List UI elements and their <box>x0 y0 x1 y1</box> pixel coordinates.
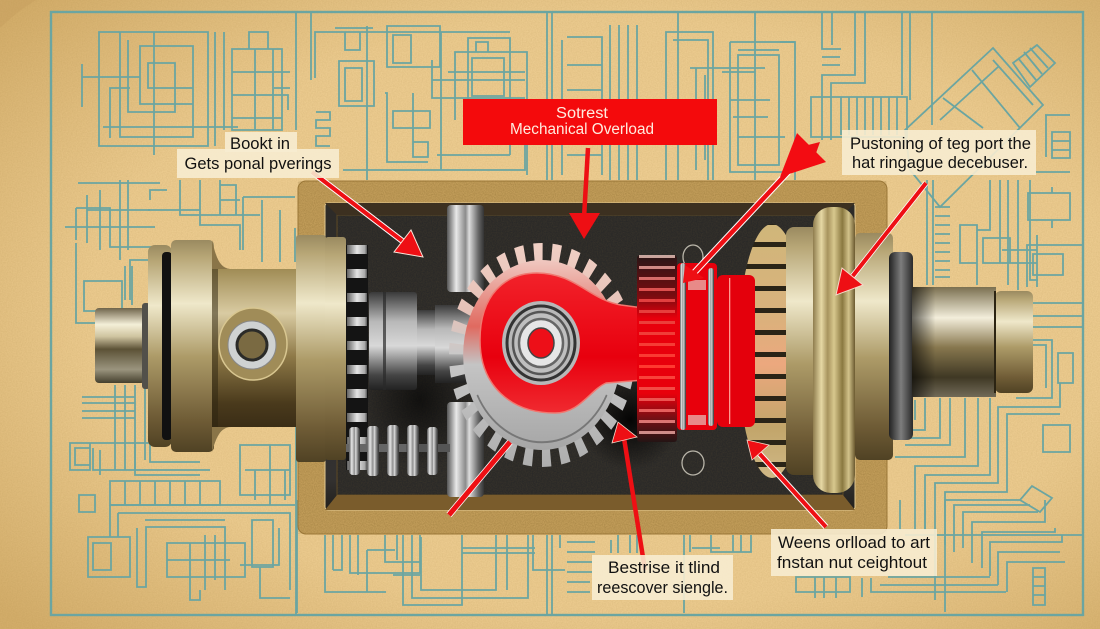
callout: top left: Bookt in <box>230 134 290 153</box>
flange three <box>296 235 326 462</box>
callout: bottom centre: Bestrise it tlind <box>608 558 720 577</box>
housing frame <box>298 181 887 534</box>
callout: bottom right: Weens orlload to art <box>778 533 930 552</box>
central overload gear <box>457 253 644 457</box>
title banner: Sotrest <box>556 105 609 122</box>
arrow: lower left line to gear <box>449 442 510 515</box>
callout: top right: Pustoning of teg port the <box>850 134 1031 153</box>
small pinion <box>435 305 470 383</box>
callout: top right: hat ringague decebuser. <box>852 153 1028 172</box>
flange two <box>171 240 214 452</box>
flange four <box>325 237 346 460</box>
dark spur gear <box>346 245 368 470</box>
right flange stack <box>786 207 913 493</box>
red overload arm <box>480 273 644 413</box>
left input housing <box>95 235 346 462</box>
bottom bearing ring <box>447 402 484 497</box>
title banner <box>463 99 717 145</box>
red gear and collars <box>637 255 755 442</box>
red collar with rings <box>677 263 717 430</box>
input stub <box>95 308 145 383</box>
callout: top left <box>177 132 339 178</box>
arrow: banner to gear <box>569 148 600 239</box>
right output shaft <box>912 287 1033 397</box>
small ring outlines on floor <box>682 245 704 475</box>
red gear <box>637 255 677 442</box>
title banner: Mechanical Overload <box>510 121 654 138</box>
callout: bottom right: fnstan nut ceightout <box>777 553 927 572</box>
callout: top left: Gets ponal pverings <box>184 154 332 173</box>
callout: bottom centre <box>592 555 733 600</box>
port fitting <box>219 308 287 380</box>
steel hub <box>369 292 417 390</box>
arrow: bottom label to gear <box>612 422 645 570</box>
arrow: top left label to housing <box>312 172 423 257</box>
flange one <box>148 245 172 447</box>
callout: top right <box>842 130 1036 175</box>
top bearing ring <box>447 205 484 292</box>
arrow: large head to collar <box>683 133 826 283</box>
gold crown gear <box>744 224 786 478</box>
callout: bottom centre: reescover siengle. <box>597 578 728 597</box>
arrow: bottom right label to crown gear <box>747 440 826 527</box>
shaft <box>417 310 437 375</box>
red drum <box>717 275 755 427</box>
panel: gearbox housing <box>298 181 887 534</box>
cylinder body <box>212 269 298 427</box>
bearing in arm <box>502 301 580 385</box>
callout: bottom right <box>771 529 937 576</box>
worm coil <box>346 425 450 476</box>
arrow: right label to disc <box>836 183 926 295</box>
housing interior <box>325 203 855 510</box>
left steel gear train <box>346 205 484 497</box>
